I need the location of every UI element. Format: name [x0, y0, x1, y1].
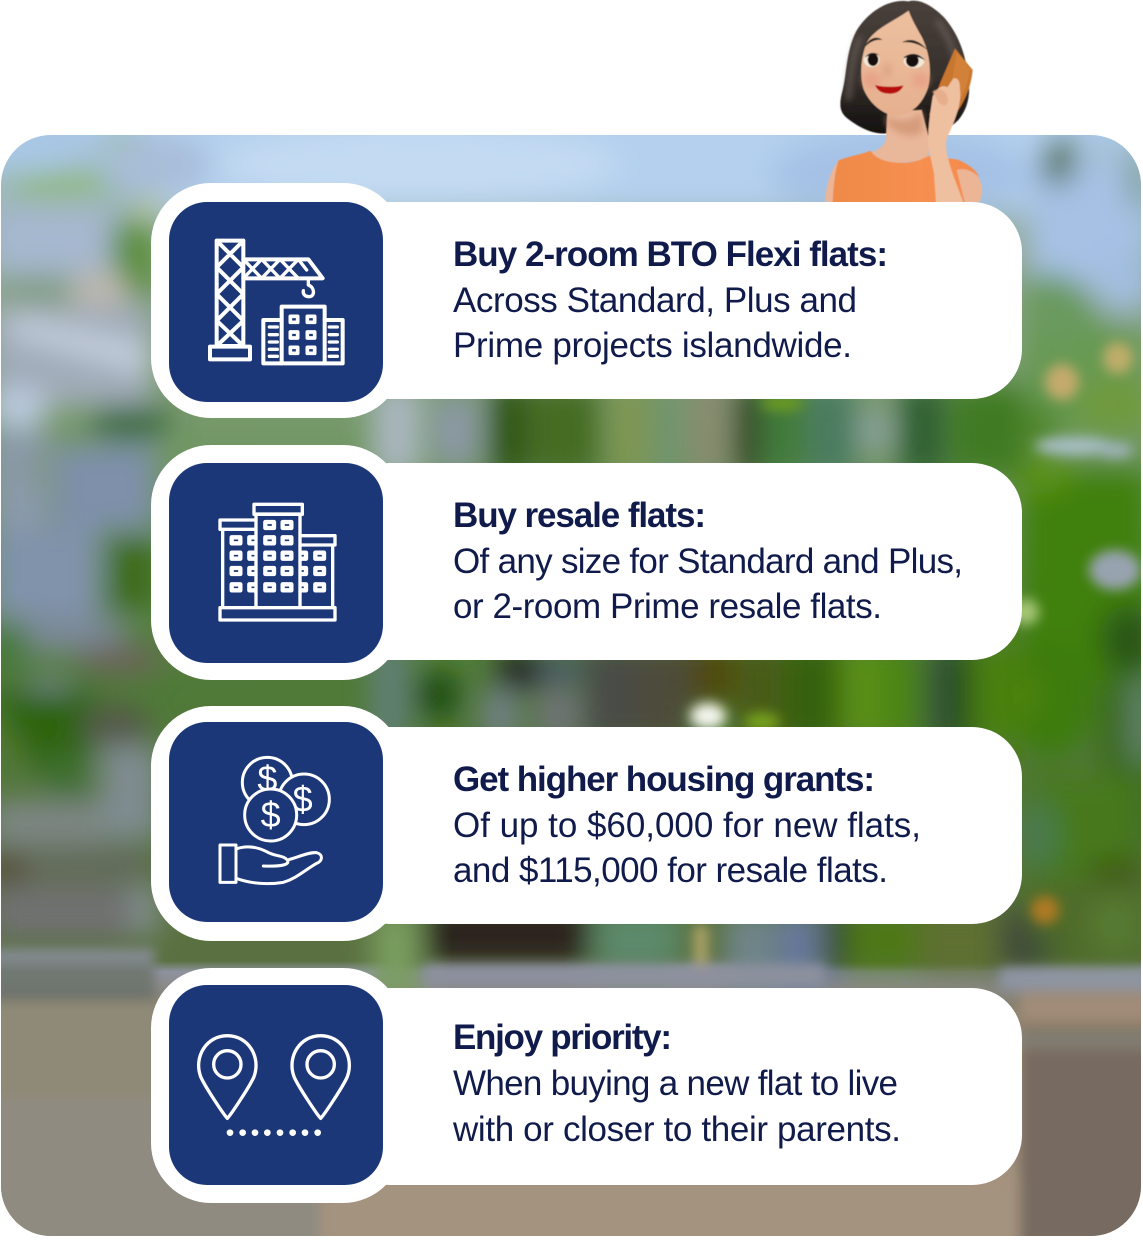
text: card 3: Get higher housing grants:: [453, 760, 875, 799]
text: card 1: [453, 235, 888, 365]
icon: coins over open hand: [220, 757, 329, 884]
left upper arm: [825, 159, 982, 204]
card 4: Enjoy priority: [151, 968, 1022, 1203]
dress: [833, 151, 979, 203]
text: card 3: [453, 760, 921, 890]
eyebrows: [865, 38, 927, 50]
text: card 4: When buying a new flat to live: [453, 1064, 898, 1103]
text: card 2: or 2-room Prime resale flats.: [453, 587, 882, 626]
right column: [1030, 160, 1143, 290]
face: [861, 11, 930, 116]
icon: coins over open hand: $: [293, 778, 313, 819]
mouth: [875, 85, 903, 94]
card 2: Buy resale flats: [151, 445, 1022, 680]
text: card 1: Prime projects islandwide.: [453, 326, 852, 365]
character: woman on phone: [825, 1, 982, 204]
text: card 4: with or closer to their parents.: [452, 1110, 901, 1149]
strip between cards 3 and 4: [372, 910, 420, 1002]
text: card 4: Enjoy priority:: [453, 1018, 672, 1057]
neck: [870, 110, 929, 165]
hair: [840, 1, 969, 137]
icon: coins over open hand: $: [257, 758, 277, 799]
icon: coins over open hand: $: [261, 794, 281, 835]
text: card 1: Buy 2-room BTO Flexi flats:: [453, 235, 888, 274]
hand and forearm: [928, 78, 964, 204]
card 3: Get higher housing grants: [151, 706, 1022, 941]
card 1: Buy 2-room BTO Flexi flats: [151, 183, 1022, 418]
strip between cards 2 and 3: [372, 645, 407, 743]
text: card 2: Buy resale flats:: [453, 496, 706, 535]
left column: [8, 174, 112, 198]
phone: [929, 48, 973, 121]
sky: [150, 115, 1050, 210]
text: card 4: [452, 1018, 901, 1149]
text: card 1: Across Standard, Plus and: [453, 281, 857, 320]
text: card 3: Of up to $60,000 for new flats,: [453, 806, 921, 845]
icon: two location pins: [199, 1036, 349, 1136]
text: card 2: Of any size for Standard and Plus,: [453, 542, 963, 581]
icon: apartment blocks: [220, 504, 335, 620]
strip between cards 1 and 2: [372, 385, 422, 477]
icon: crane and buildings: [210, 241, 343, 363]
sharper background details: [0, 342, 1143, 1240]
eyes: [864, 53, 880, 67]
text: card 3: and $115,000 for resale flats.: [453, 851, 888, 890]
text: card 2: [453, 496, 963, 626]
